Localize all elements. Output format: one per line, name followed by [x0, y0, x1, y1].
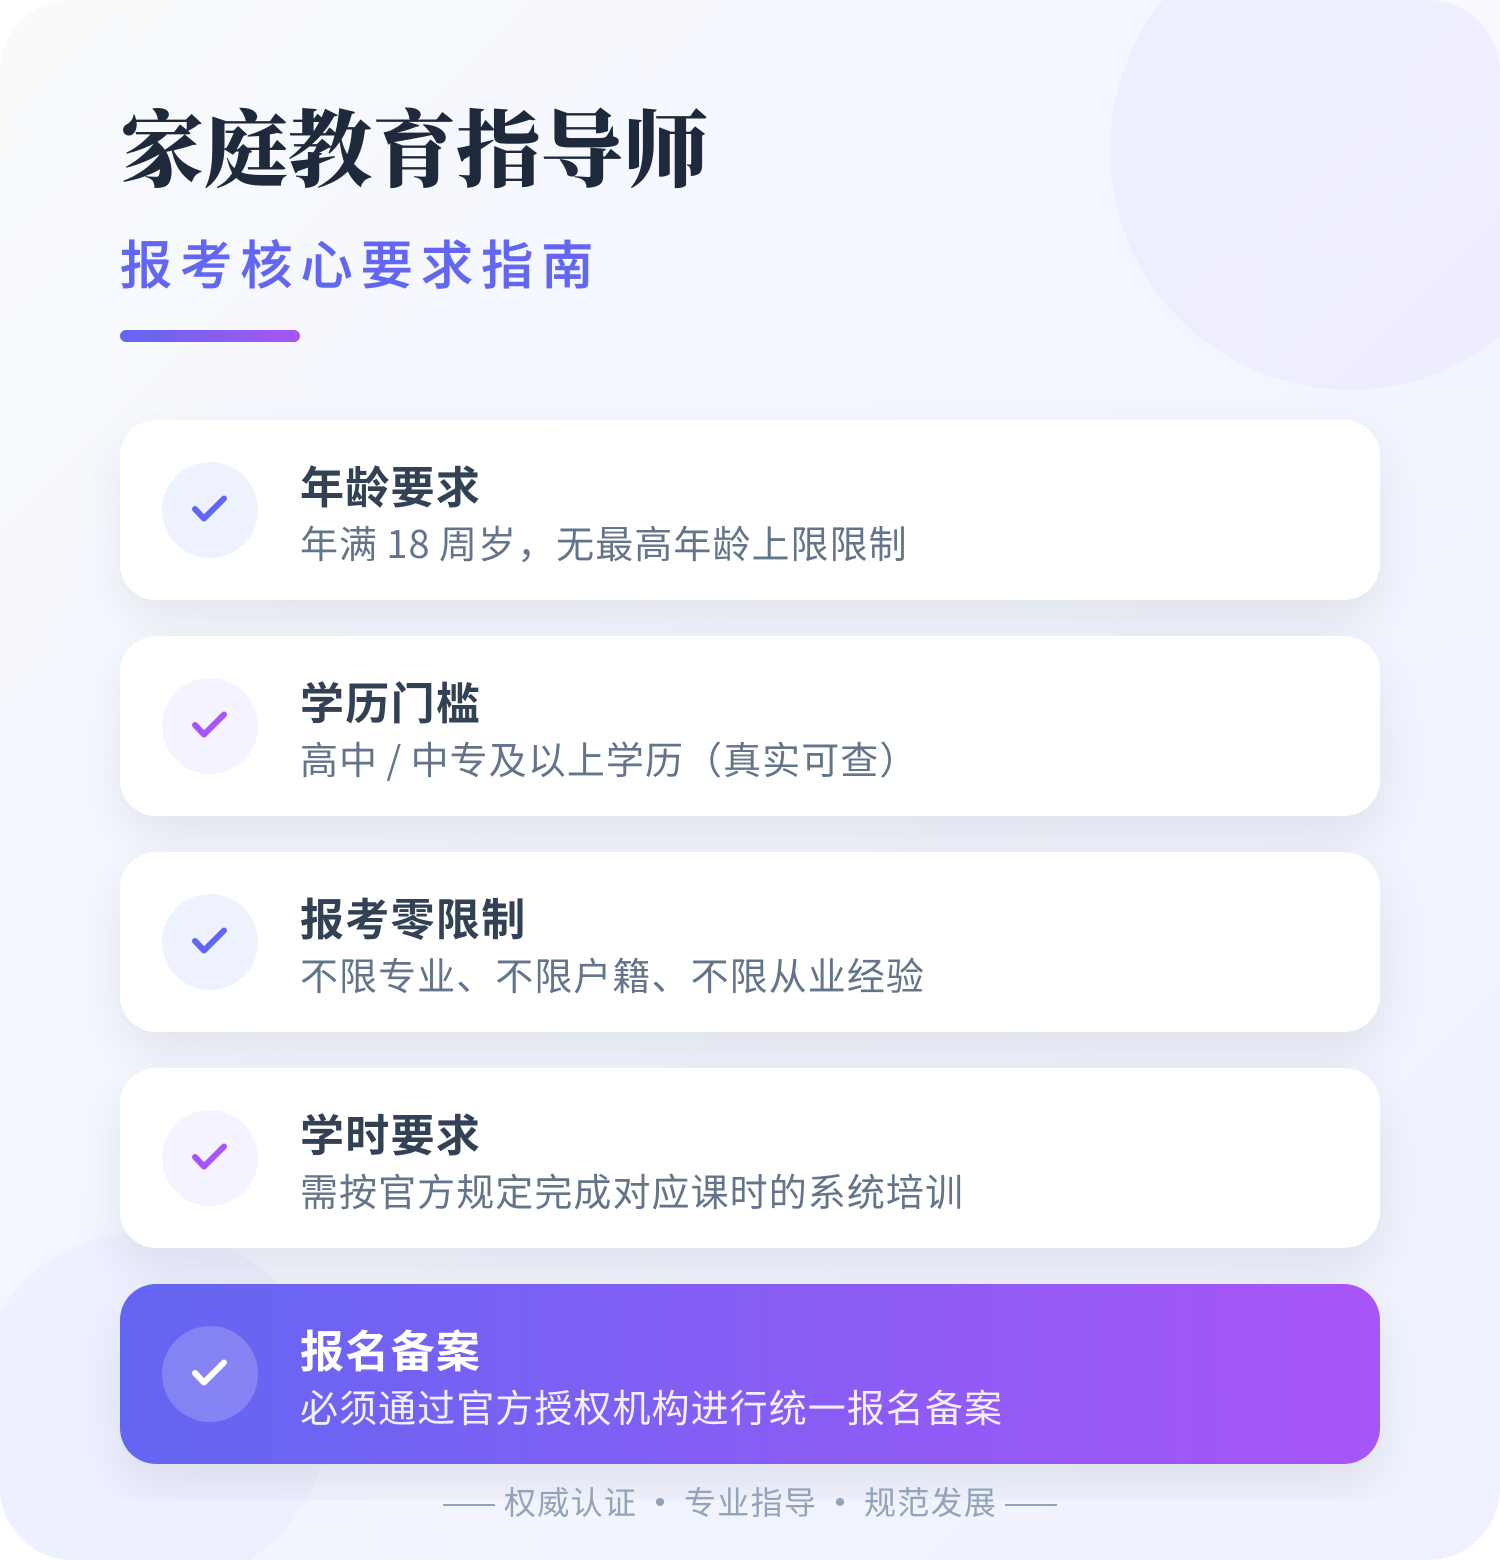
decorative circle: bottom left	[0, 1230, 330, 1560]
footer: •	[824, 1478, 857, 1524]
footer	[443, 1478, 1057, 1524]
footer: 权威认证	[504, 1478, 637, 1524]
card text: 需按官方规定完成对应课时的系统培训	[300, 1162, 964, 1217]
card text: 高中 / 中专及以上学历（真实可查）	[300, 730, 918, 785]
card: no restrictions	[120, 852, 1380, 1032]
card: education threshold	[120, 636, 1380, 816]
title: 家庭教育指导师	[120, 84, 708, 205]
card text: 不限专业、不限户籍、不限从业经验	[300, 946, 925, 1001]
card text: 必须通过官方授权机构进行统一报名备案	[300, 1378, 1003, 1433]
card: registration filing (highlight)	[120, 1284, 1380, 1464]
footer: 专业指导	[684, 1478, 817, 1524]
icon: check	[162, 1110, 258, 1206]
card: age requirement	[120, 420, 1380, 600]
footer: 规范发展	[864, 1478, 997, 1524]
subtitle: 报考核心要求指南	[120, 224, 602, 299]
card heading: 报名备案	[300, 1316, 481, 1380]
icon: check	[162, 678, 258, 774]
decorative circle: top right	[1110, 0, 1500, 390]
card text: 年满 18 周岁，无最高年龄上限限制	[300, 514, 908, 569]
accent bar	[120, 330, 300, 342]
card heading: 年龄要求	[300, 452, 481, 516]
icon: check	[162, 462, 258, 558]
card heading: 报考零限制	[300, 884, 526, 948]
icon: check	[162, 1326, 258, 1422]
card heading: 学时要求	[300, 1100, 481, 1164]
card: study hours	[120, 1068, 1380, 1248]
footer: •	[644, 1478, 677, 1524]
icon: check	[162, 894, 258, 990]
card heading: 学历门槛	[300, 668, 481, 732]
